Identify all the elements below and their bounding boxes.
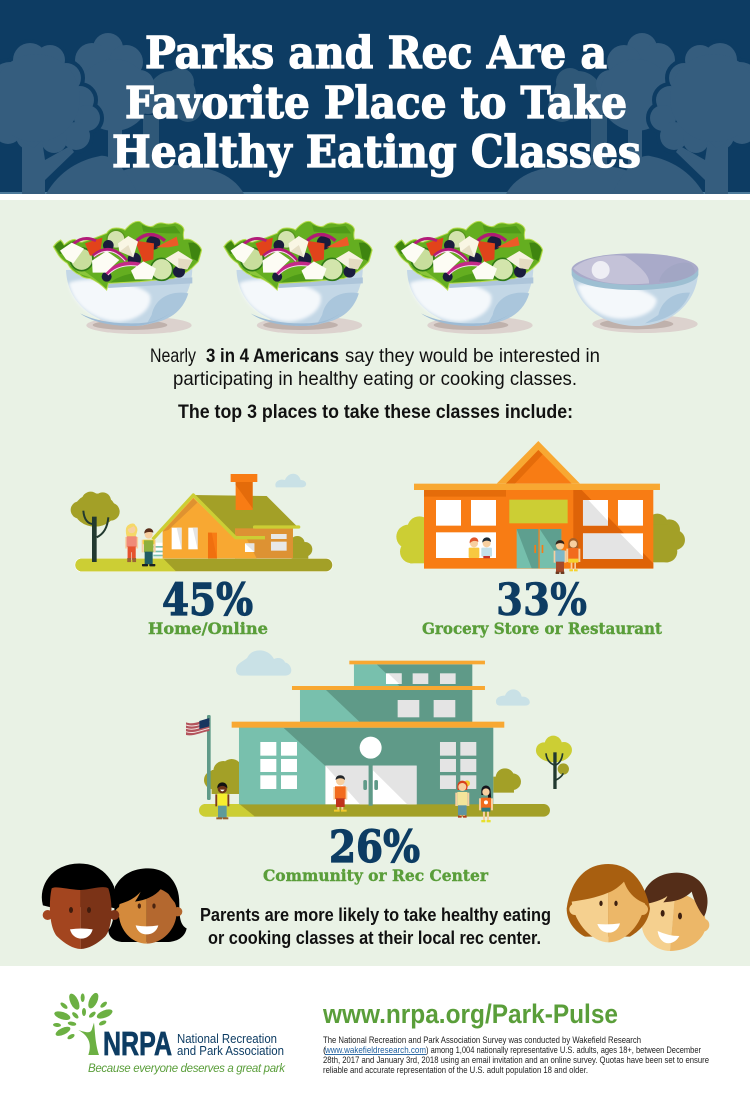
person: woman bbox=[566, 538, 580, 571]
person: boy with orange shirt bbox=[333, 775, 347, 812]
intro text: Nearly bbox=[150, 345, 196, 367]
stat: 45% bbox=[148, 575, 268, 638]
sign bbox=[509, 500, 568, 523]
parents text bbox=[200, 905, 551, 948]
stat: 33%: 33% bbox=[496, 575, 587, 626]
title: Healthy Eating Classes bbox=[112, 127, 641, 178]
bushes bbox=[204, 759, 242, 794]
icon: tree logo bbox=[53, 991, 114, 1055]
logo: NRPA bbox=[53, 991, 286, 1075]
illustration: grocery store bbox=[396, 441, 685, 574]
bush bbox=[290, 536, 312, 559]
man bbox=[42, 864, 119, 949]
bushes bbox=[396, 516, 431, 563]
url: www.nrpa.org/Park-Pulse bbox=[322, 999, 618, 1029]
ground bbox=[75, 558, 333, 572]
methodology note: www.wakefieldresearch.com bbox=[324, 1045, 426, 1055]
person: man bbox=[142, 528, 156, 566]
roof bbox=[193, 495, 297, 539]
person: woman bbox=[125, 524, 138, 562]
title: Parks and Rec Are a bbox=[145, 28, 607, 79]
icon: parents right faces bbox=[567, 864, 709, 951]
methodology note: reliable and accurate representation of the U.S. adult population 18 and older. bbox=[323, 1065, 588, 1075]
building bbox=[424, 490, 653, 569]
stat: 33% bbox=[422, 575, 663, 638]
intro text: say they would be interested in bbox=[345, 345, 600, 367]
wing bbox=[235, 528, 293, 558]
main body bbox=[163, 497, 236, 558]
stat: 26% bbox=[263, 822, 489, 885]
icon: salad bowl 3 bbox=[394, 221, 543, 334]
title bbox=[112, 28, 641, 178]
woman bbox=[567, 864, 650, 942]
header banner bbox=[0, 0, 750, 194]
illustration: home bbox=[71, 474, 333, 572]
stat: 45%: 45% bbox=[162, 575, 253, 626]
person: man bbox=[554, 540, 566, 574]
tree silhouettes left bbox=[0, 33, 244, 194]
cloud bbox=[275, 474, 306, 487]
intro text bbox=[150, 345, 600, 390]
icon: empty bowl bbox=[572, 253, 698, 333]
fence bbox=[153, 543, 163, 557]
windows and door bbox=[172, 528, 182, 549]
top floor bbox=[354, 664, 472, 687]
tree silhouettes right bbox=[506, 33, 750, 194]
background panel bbox=[0, 200, 750, 966]
methodology note: The National Recreation and Park Association Survey was conducted by Wakefield Research bbox=[323, 1035, 641, 1045]
icon: parents left faces bbox=[42, 864, 187, 949]
stat: 45%: Home/Online bbox=[148, 619, 268, 638]
intro text: 3 in 4 Americans bbox=[206, 345, 339, 367]
doors bbox=[517, 529, 538, 568]
methodology note: ( bbox=[323, 1045, 326, 1055]
methodology note bbox=[323, 1035, 709, 1075]
stat: 26%: 26% bbox=[329, 822, 420, 873]
parents text: or cooking classes at their local rec center. bbox=[208, 928, 541, 948]
tagline: Because everyone deserves a great park bbox=[88, 1063, 286, 1075]
middle floor bbox=[300, 690, 472, 722]
gable bbox=[497, 441, 580, 484]
ground floor bbox=[239, 728, 493, 804]
illustration: community rec center bbox=[186, 650, 572, 822]
flag bbox=[186, 715, 211, 800]
woman bbox=[108, 868, 187, 944]
logo name bbox=[177, 1032, 284, 1058]
person: girl with black hair bbox=[479, 785, 493, 822]
icon: salad bowl 2 bbox=[224, 221, 372, 334]
person: child with yellow shirt bbox=[215, 782, 229, 819]
chimney bbox=[236, 480, 253, 510]
person: girl with red hair bbox=[455, 780, 470, 818]
logo name: National Recreation bbox=[177, 1032, 277, 1046]
logo name: and Park Association bbox=[177, 1044, 284, 1058]
windows bbox=[436, 500, 643, 559]
roofs bbox=[349, 661, 485, 664]
title: Favorite Place to Take bbox=[125, 78, 627, 129]
icon: salad bowl 1 bbox=[53, 221, 202, 334]
wordmark: NRPA bbox=[103, 1025, 172, 1062]
windows left bbox=[260, 742, 297, 789]
intro text: participating in healthy eating or cooking classes. bbox=[173, 368, 577, 390]
clouds bbox=[236, 650, 291, 676]
person: window girl bbox=[469, 537, 479, 558]
ground bbox=[199, 804, 550, 817]
doors bbox=[325, 766, 369, 804]
tree bbox=[536, 736, 572, 789]
stat: 33%: Grocery Store or Restaurant bbox=[422, 619, 663, 638]
tree bbox=[71, 492, 120, 562]
windows right bbox=[440, 742, 476, 789]
stat: 26%: Community or Rec Center bbox=[263, 866, 489, 885]
parents text: Parents are more likely to take healthy eating bbox=[200, 905, 551, 925]
man bbox=[642, 873, 709, 951]
person: window boy bbox=[481, 537, 492, 558]
subheading: The top 3 places to take these classes include: bbox=[178, 401, 573, 423]
